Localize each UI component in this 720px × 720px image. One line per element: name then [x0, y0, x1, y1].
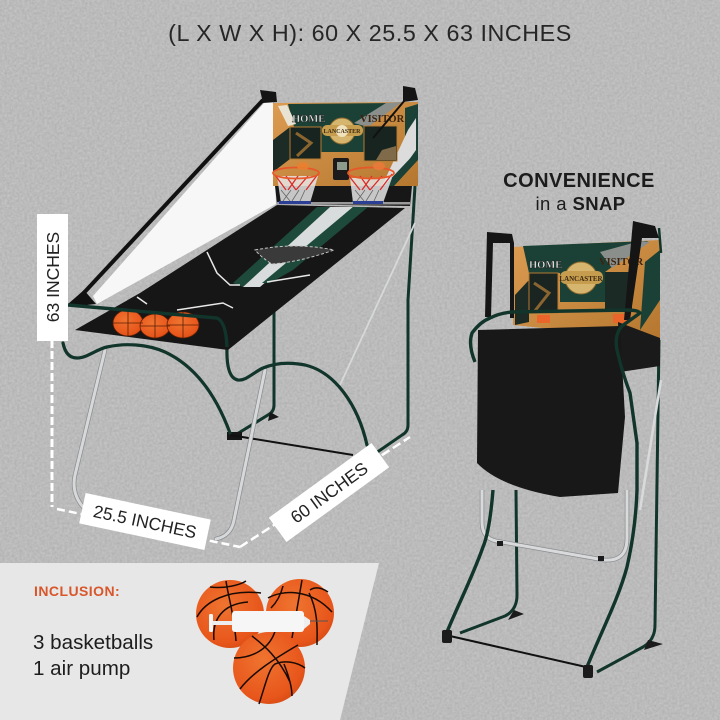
label: 63 inches: 63 INCHES	[43, 232, 63, 322]
ramp logo	[255, 246, 334, 264]
icon: air pump	[209, 611, 328, 632]
lower back strip	[275, 186, 412, 206]
scoreboard panel: LANCASTER	[323, 129, 361, 135]
folded floor bar	[450, 636, 586, 667]
inclusion panel	[0, 563, 379, 720]
green curved rails	[63, 343, 367, 445]
folded arcade machine	[442, 221, 663, 678]
scoreboard panel	[273, 86, 418, 186]
folded rear legs	[460, 340, 659, 672]
rear net behind	[618, 322, 660, 372]
rear legs	[232, 186, 415, 453]
heading: convenience in a snap	[503, 170, 655, 214]
width dashed line	[57, 509, 240, 547]
inclusion list	[33, 631, 153, 680]
black side frame	[68, 90, 277, 306]
ramp white lines	[137, 252, 310, 310]
silver frame clips	[497, 541, 604, 561]
silver front frame	[74, 350, 265, 539]
folded curved legs	[447, 490, 637, 667]
folded feet	[442, 630, 452, 643]
inclusion list: 1 air pump	[33, 657, 130, 680]
inclusion list: 3 basketballs	[33, 631, 153, 654]
heading: convenience in a snap: CONVENIENCE	[503, 170, 655, 192]
green folded rail	[471, 310, 640, 490]
scoreboard panel: VISITOR	[360, 114, 405, 125]
left hoop	[273, 162, 319, 204]
folded silver frame	[482, 380, 661, 560]
label: 25.5 inches	[79, 493, 211, 550]
floor bar	[230, 435, 353, 455]
assembled arcade machine	[63, 86, 418, 539]
label: 60 inches: 60 INCHES	[287, 458, 372, 527]
icon: basketballs	[196, 579, 334, 704]
front tray rail	[68, 305, 227, 347]
title: (L X W X H): 60 X 25.5 X 63 INCHES	[168, 20, 572, 46]
white backboard side	[93, 102, 276, 304]
folded panel text: HOME	[529, 260, 562, 271]
folded scoreboard panel: VISITOR	[599, 257, 644, 268]
black net ramp	[75, 205, 405, 350]
height dashed line	[50, 340, 54, 507]
folded logo	[565, 262, 597, 294]
label: 60 inches	[269, 443, 389, 542]
folded scoreboard panel	[513, 240, 660, 340]
ball tray basketballs	[113, 310, 199, 338]
label: 63 inches	[37, 214, 68, 341]
scoreboard text: HOME	[292, 114, 325, 125]
scoreboard logo	[329, 118, 355, 144]
green and white ramp stripes	[233, 207, 330, 287]
depth dashed line	[240, 437, 410, 547]
timer	[333, 158, 349, 180]
folded black net	[477, 326, 625, 497]
folded scoreboard panel: LANCASTER	[559, 275, 604, 283]
label: 25.5 inches: 25.5 INCHES	[91, 501, 198, 542]
black side straps	[485, 221, 659, 320]
right hoop	[348, 162, 394, 204]
heading: convenience in a snap: in a SNAP	[536, 193, 625, 214]
support strut	[340, 223, 415, 385]
inclusion heading: INCLUSION:	[34, 583, 120, 599]
